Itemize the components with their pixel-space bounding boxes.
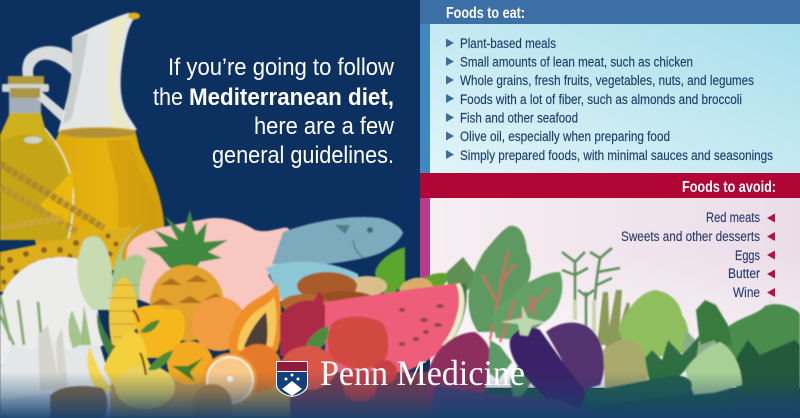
list: foods to eat: Olive oil, especially when preparing food	[460, 129, 670, 144]
headline: here are a few	[254, 113, 395, 140]
icon: tan nut and leaf	[397, 273, 452, 303]
icon: fish upper	[272, 217, 403, 265]
list: foods to avoid: Wine	[733, 285, 760, 300]
icon: papaya	[229, 283, 281, 358]
icon: red apple	[280, 346, 336, 390]
icon: watermelon	[325, 283, 467, 372]
icon: lettuce	[618, 290, 688, 360]
icon: chard leaf right	[492, 272, 562, 342]
icon: corn	[97, 277, 140, 355]
list: foods to avoid	[621, 210, 775, 300]
list: foods to eat: Foods with a lot of fiber, such as almonds and broccoli	[460, 92, 742, 107]
icon: orange whole	[234, 344, 282, 392]
icon: leaf on pomegranate	[305, 326, 329, 350]
icon: zucchini	[585, 376, 740, 418]
icon: chicken	[126, 218, 295, 310]
icon: cabbage purple	[546, 323, 604, 392]
list: foods to avoid: Sweets and other desserts	[621, 229, 760, 244]
illustration: proteins	[126, 217, 452, 314]
base layers behind the bottom produce	[0, 365, 800, 418]
illustration: left produce	[0, 210, 467, 418]
list: foods to eat: Plant-based meals	[460, 36, 556, 51]
icon: orange slice	[203, 353, 257, 407]
icon: beet	[428, 332, 492, 405]
list: foods to avoid: Red meats	[706, 210, 760, 225]
heading bar: foods to avoid	[420, 173, 800, 198]
icon: chard leaf	[468, 226, 531, 340]
icon: pineapple	[150, 265, 224, 341]
icon: pineapple crown	[146, 210, 228, 268]
icon: oil jug	[22, 12, 165, 270]
heading bar: foods to avoid: Foods to avoid:	[682, 179, 776, 196]
icon: tangerine	[167, 341, 213, 385]
heading bar: foods to eat: Foods to eat:	[446, 5, 525, 22]
grain pile	[0, 226, 132, 292]
panel: foods to avoid	[420, 173, 800, 388]
list: foods to avoid: Eggs	[735, 248, 760, 263]
wordmark: Penn Medicine	[320, 353, 525, 393]
illustration: right produce	[428, 305, 800, 418]
icon: yellow bell pepper	[132, 305, 185, 358]
icon: low foliage	[430, 385, 600, 418]
icon: round fruit	[192, 384, 232, 418]
headline: If you’re going to follow	[168, 54, 395, 81]
icon: green leaf	[375, 247, 405, 296]
headline: Mediterranean diet,	[189, 84, 394, 111]
icon: small leaf	[447, 257, 477, 290]
icon: almonds	[281, 272, 375, 314]
icon: fennel and leek	[0, 295, 112, 400]
icon: tan nut	[347, 276, 387, 296]
icon: red tomatoes	[343, 360, 397, 402]
icon: pomegranate	[280, 291, 333, 358]
panel: foods to eat	[420, 0, 800, 174]
icon: yellow apple	[115, 350, 175, 409]
list: foods to eat: Small amounts of lean meat, such as chicken	[460, 54, 693, 70]
icon: cabbage green	[685, 342, 742, 398]
list: foods to eat: Fish and other seafood	[460, 110, 578, 126]
icon: dark leaves	[488, 340, 534, 400]
illustration: chard and back greens	[447, 226, 800, 372]
icon: fish lower	[266, 262, 360, 305]
icon: orange	[192, 297, 246, 351]
icon: potato	[50, 386, 108, 418]
icon: Penn shield	[276, 361, 308, 397]
headline: general guidelines.	[212, 142, 394, 169]
icon: red bell pepper	[328, 316, 388, 368]
icon: cauliflower	[0, 257, 104, 365]
heading bar: foods to eat	[420, 0, 800, 24]
icon: asparagus	[597, 290, 630, 350]
icon: broccoli	[680, 300, 800, 372]
illustration: oil and grains	[0, 12, 165, 292]
bottom blue fade	[0, 372, 800, 418]
list: foods to eat: Whole grains, fresh fruits, vegetables, nuts, and legumes	[460, 73, 754, 88]
list: foods to eat	[446, 36, 773, 163]
logo: Penn Medicine	[276, 353, 525, 397]
headline: the	[153, 84, 183, 111]
icon: corn husk	[77, 223, 146, 310]
icon: eggplant	[500, 305, 586, 408]
icon: artichoke	[603, 340, 648, 388]
icon: wheat	[0, 164, 104, 232]
list: foods to avoid: Butter	[728, 266, 760, 281]
icon: oil bottle	[0, 76, 73, 240]
icon: pear	[104, 331, 160, 395]
icon: carrot tops	[562, 248, 620, 335]
icon: dark greens	[645, 335, 800, 392]
headline	[153, 54, 395, 169]
icon: banana	[87, 346, 112, 392]
